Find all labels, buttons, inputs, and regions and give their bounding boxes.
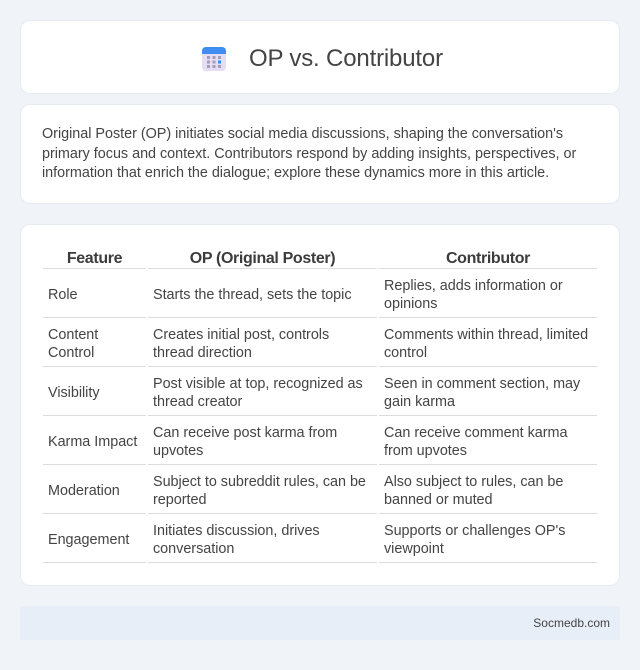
row: moderation: Moderation	[48, 483, 120, 499]
comparison table: opinions	[384, 296, 437, 312]
row: visibility: Visibility	[48, 385, 100, 401]
comparison table: from upvotes	[384, 443, 467, 459]
comparison table: Supports or challenges OP's	[384, 523, 565, 539]
row: content control	[48, 327, 98, 361]
panel: title card	[20, 20, 620, 94]
comparison table: Can receive post karma from	[153, 425, 337, 441]
intro text: Original Poster (OP) initiates social media discussions, shaping the conversation's	[42, 126, 563, 142]
row: engagement: Engagement	[48, 532, 129, 548]
panel: comparison table	[20, 224, 620, 586]
comparison table: control	[384, 345, 427, 361]
comparison table: Creates initial post, controls	[153, 327, 329, 343]
row: role: Role	[48, 287, 78, 303]
comparison table: Can receive comment karma	[384, 425, 567, 441]
table header: OP (Original Poster)	[190, 250, 335, 267]
comparison table: upvotes	[153, 443, 203, 459]
comparison table	[43, 250, 597, 563]
comparison table: Comments within thread, limited	[384, 327, 588, 343]
intro text	[42, 126, 576, 181]
comparison table: conversation	[153, 541, 234, 557]
panel: introduction	[20, 104, 620, 204]
comparison table: Replies, adds information or	[384, 278, 563, 294]
comparison table: Seen in comment section, may	[384, 376, 580, 392]
row: content control: Control	[48, 345, 94, 361]
title: OP vs. Contributor	[249, 45, 443, 72]
comparison table: Post visible at top, recognized as	[153, 376, 363, 392]
comparison table: banned or muted	[384, 492, 493, 508]
row: content control: Content	[48, 327, 98, 343]
intro text: information that enrich the dialogue; explore these dynamics more in this article.	[42, 165, 549, 181]
row: karma impact: Karma Impact	[48, 434, 137, 450]
footer bar	[20, 606, 620, 640]
table header: Feature	[67, 250, 122, 267]
table header	[67, 250, 530, 267]
comparison table: viewpoint	[384, 541, 444, 557]
comparison table: thread direction	[153, 345, 252, 361]
comparison table: reported	[153, 492, 206, 508]
comparison table: Starts the thread, sets the topic	[153, 287, 352, 303]
icon: calendar	[202, 47, 226, 71]
footer source text: Socmedb.com	[533, 616, 610, 630]
intro text: primary focus and context. Contributors respond by adding insights, perspectives, or	[42, 146, 576, 162]
comparison table: Initiates discussion, drives	[153, 523, 320, 539]
comparison table: Subject to subreddit rules, can be	[153, 474, 366, 490]
comparison table: thread creator	[153, 394, 242, 410]
table header: Contributor	[446, 250, 530, 267]
comparison table: Also subject to rules, can be	[384, 474, 563, 490]
comparison table: gain karma	[384, 394, 455, 410]
